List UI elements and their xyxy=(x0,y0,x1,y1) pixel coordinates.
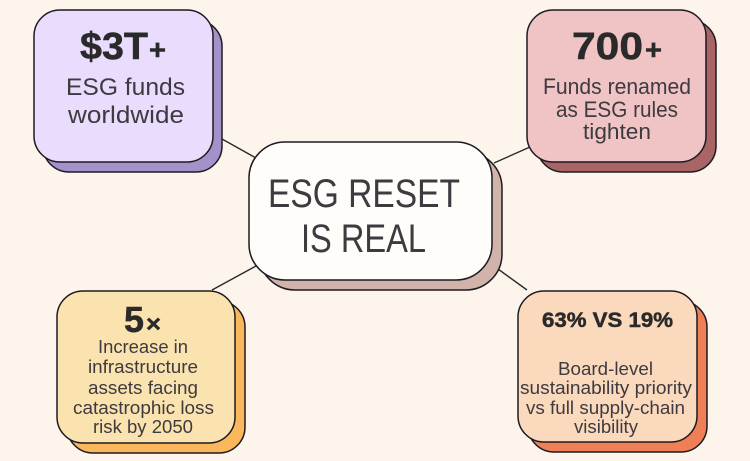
panel: 5x infrastructure risk xyxy=(57,291,245,453)
description: increase in infrastructure assets facing catastrophic loss risk by 2050: infrastructure xyxy=(88,356,198,377)
description: board-level sustainability priority vs full supply-chain visibility: vs full supply-chain xyxy=(526,397,685,418)
connector lines from the center box to the four cards xyxy=(212,139,530,290)
description: increase in infrastructure assets facing catastrophic loss risk by 2050: Increase in xyxy=(98,336,188,357)
description: funds renamed as ESG rules tighten: as ESG rules xyxy=(556,97,678,122)
description: increase in infrastructure assets facing catastrophic loss risk by 2050: catastrophic loss xyxy=(73,397,214,418)
stat: $3T+: + xyxy=(149,34,166,65)
description: funds renamed as ESG rules tighten: Funds renamed xyxy=(543,74,691,99)
description: increase in infrastructure assets facing catastrophic loss risk by 2050: risk by 2050 xyxy=(93,416,193,437)
description: board-level sustainability priority vs full supply-chain visibility: sustainability priority xyxy=(520,377,693,398)
description: ESG funds worldwide: ESG funds xyxy=(66,74,185,101)
description: board-level sustainability priority vs full supply-chain visibility xyxy=(520,358,693,437)
stat: $3T+: $3T xyxy=(80,26,148,68)
stat: 5x: × xyxy=(146,311,161,338)
stat: 5x: 5 xyxy=(124,299,144,340)
description: ESG funds worldwide xyxy=(66,74,185,129)
description: board-level sustainability priority vs full supply-chain visibility: visibility xyxy=(574,416,639,437)
description: funds renamed as ESG rules tighten xyxy=(543,74,691,144)
stat: 700+: 700 xyxy=(572,26,643,68)
panel: 63% vs 19% board priority xyxy=(518,291,707,452)
description: ESG funds worldwide: worldwide xyxy=(67,102,184,129)
description: increase in infrastructure assets facing catastrophic loss risk by 2050: assets facing xyxy=(88,377,198,398)
title: ESG reset is real: ESG RESET xyxy=(268,172,460,216)
description: funds renamed as ESG rules tighten: tighten xyxy=(583,119,651,144)
panel: 700+ funds renamed xyxy=(527,10,716,172)
stat: 700+: + xyxy=(645,34,662,65)
stat: 63% vs 19%: 63% VS 19% xyxy=(542,309,673,332)
description: increase in infrastructure assets facing catastrophic loss risk by 2050 xyxy=(73,336,214,437)
title: ESG reset is real: IS REAL xyxy=(301,217,426,261)
panel: $3T+ ESG funds xyxy=(34,10,222,172)
title: ESG reset is real xyxy=(268,172,460,261)
stat: 5x xyxy=(124,299,161,340)
panel: center title box xyxy=(249,142,502,290)
description: board-level sustainability priority vs full supply-chain visibility: Board-level xyxy=(558,358,653,379)
